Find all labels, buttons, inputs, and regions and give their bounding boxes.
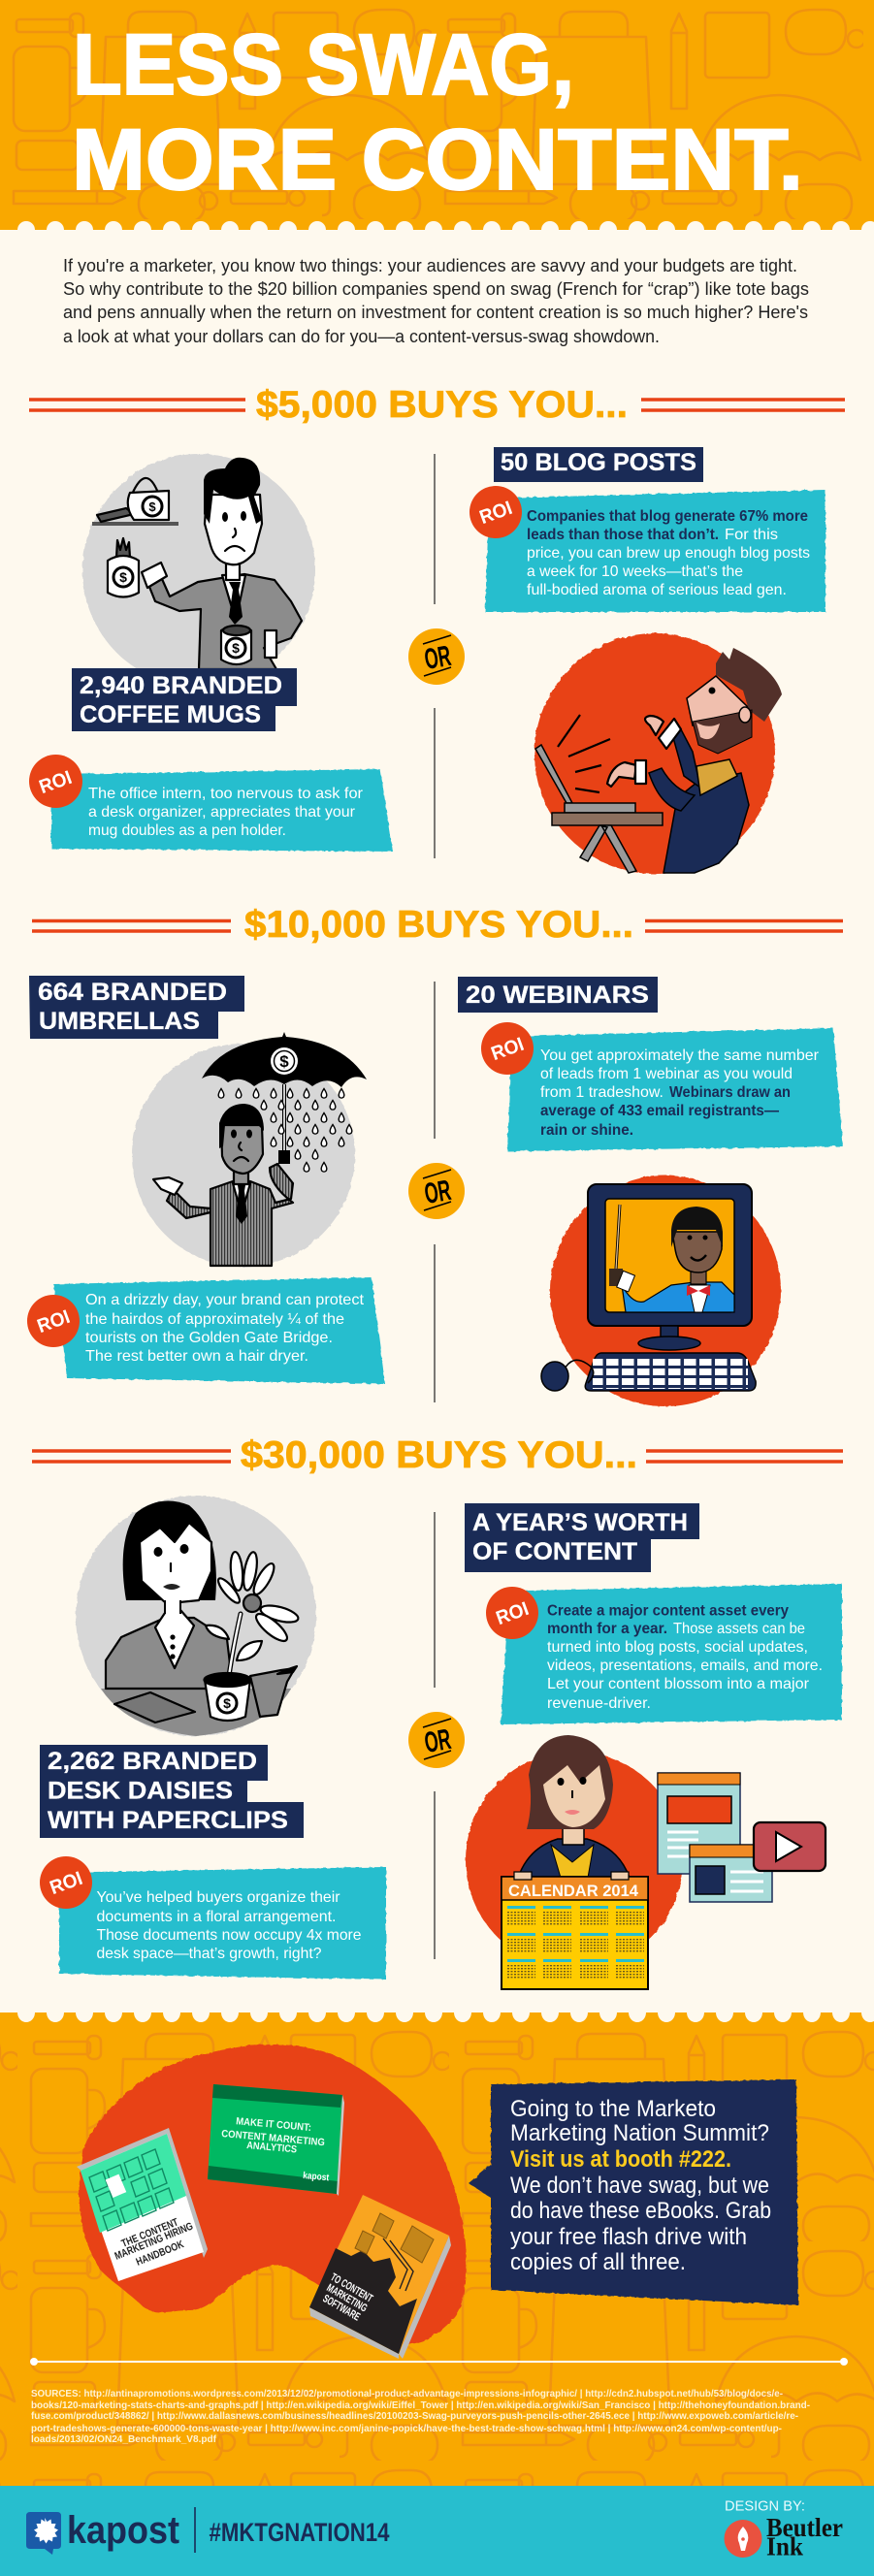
ebook: content marketing software: SOFTWARE bbox=[320, 2293, 362, 2324]
icon: shelf with mug bbox=[92, 478, 178, 526]
panel: ROI content: month for a year. bbox=[547, 1621, 667, 1637]
panel: ROI webinars: ROI bbox=[489, 1034, 527, 1065]
laptop and desk bbox=[535, 715, 663, 873]
footer promo band bbox=[0, 2012, 874, 2486]
label: 2,940 branded coffee mugs: 2,940 BRANDED bbox=[80, 672, 282, 699]
illustration: bearded blogger at laptop bbox=[534, 633, 782, 874]
label: a year's worth of content: OF CONTENT bbox=[472, 1538, 637, 1565]
panel: ROI content bbox=[486, 1584, 842, 1724]
label: 50 blog posts: 50 BLOG POSTS bbox=[501, 449, 696, 476]
rain drops bbox=[218, 1088, 352, 1172]
icon: umbrella: $ bbox=[279, 1052, 289, 1071]
ebook: content marketing hiring handbook: MARKETING HIRING bbox=[113, 2220, 195, 2263]
label: a year's worth of content: A YEAR’S WORTH bbox=[472, 1509, 688, 1536]
ebook: content marketing software: MARKETING bbox=[324, 2282, 369, 2315]
panel: ROI content: videos, presentations, emails, and more. bbox=[547, 1658, 823, 1674]
panel: ROI desk daisies: Those documents now occupy 4x more bbox=[97, 1927, 362, 1944]
intro text: So why contribute to the $20 billion companies spend on swag (French for “crap”) like tote bags bbox=[63, 279, 809, 299]
icon: daisy flower bbox=[206, 1551, 300, 1676]
panel: ROI mugs: a desk organizer, appreciates that your bbox=[88, 804, 356, 821]
icon: flower pot and stapler bbox=[204, 1666, 297, 1721]
panel: ROI blog posts: full-bodied aroma of serious lead gen. bbox=[527, 582, 787, 598]
icon: OR badge 2 bbox=[408, 1163, 465, 1219]
panel: ROI desk daisies: desk space—that’s growth, right? bbox=[97, 1946, 322, 1962]
label: 20 webinars bbox=[458, 977, 658, 1013]
icon: shelf with mug: $ bbox=[148, 499, 156, 514]
panel: ROI mugs: ROI bbox=[37, 767, 75, 798]
panel: ROI webinars: from 1 tradeshow. bbox=[540, 1084, 664, 1101]
intro text: If you're a marketer, you know two things: your audiences are savvy and your budgets are tight. bbox=[63, 256, 797, 275]
header banner bbox=[0, 0, 874, 230]
hashtag: #MKTGNATION14 bbox=[210, 2518, 390, 2547]
icon: OR badge 3 bbox=[408, 1712, 465, 1768]
illustration: woman with desk daisy bbox=[76, 1496, 316, 1736]
panel: ROI umbrellas: tourists on the Golden Gate Bridge. bbox=[85, 1330, 333, 1346]
keyboard and mouse bbox=[541, 1353, 756, 1391]
panel: ROI webinars: Webinars draw an bbox=[669, 1084, 791, 1101]
label: 2,940 branded coffee mugs: COFFEE MUGS bbox=[80, 701, 261, 728]
body bbox=[106, 1618, 233, 1689]
intro text: a look at what your dollars can do for you—a content-versus-swag showdown. bbox=[63, 327, 660, 346]
callout: Marketo summit: Going to the Marketo bbox=[510, 2096, 716, 2122]
panel: ROI blog posts: leads than those that don’t. bbox=[527, 527, 719, 543]
illustration: man with umbrella bbox=[132, 1032, 367, 1267]
label: 2,940 branded coffee mugs bbox=[72, 668, 297, 731]
heading: $5,000 bbox=[29, 384, 845, 426]
suit bbox=[167, 1164, 293, 1266]
panel: ROI content: Let your content blossom into a major bbox=[547, 1676, 810, 1692]
callout: Marketo summit: Visit us at booth #222. bbox=[510, 2146, 731, 2173]
illustration: woman with calendar and content assets bbox=[466, 1735, 825, 1989]
logo: Beutler Ink: Ink bbox=[766, 2531, 803, 2560]
ebook: content marketing hiring handbook: THE CONTENT bbox=[120, 2216, 180, 2250]
ebook: content marketing hiring handbook bbox=[77, 2128, 208, 2281]
panel: ROI mugs: mug doubles as a pen holder. bbox=[88, 822, 286, 839]
panel: ROI desk daisies: ROI bbox=[48, 1868, 85, 1899]
sources bbox=[31, 2388, 810, 2445]
label: a year's worth of content bbox=[465, 1503, 699, 1572]
callout: Marketo summit: do have these eBooks. Grab bbox=[510, 2198, 771, 2224]
panel: ROI blog posts: a week for 10 weeks—that’s the bbox=[527, 564, 743, 580]
calendar: CALENDAR 2014 bbox=[508, 1882, 639, 1900]
logo: kapost: kapost bbox=[67, 2509, 179, 2552]
icon: OR badge 3: OR bbox=[422, 1723, 454, 1759]
ebook: content marketing hiring handbook: HANDBOOK bbox=[135, 2238, 185, 2269]
panel: ROI umbrellas: ROI bbox=[35, 1306, 73, 1337]
panel: ROI blog posts: Companies that blog generate 67% more bbox=[527, 508, 808, 525]
calendar bbox=[502, 1872, 648, 1989]
panel: ROI blog posts bbox=[469, 486, 825, 612]
ebook: content marketing analytics: MAKE IT COUNT: bbox=[236, 2115, 311, 2134]
head bbox=[234, 1169, 248, 1184]
jacket bbox=[664, 773, 749, 873]
label: 664 branded umbrellas: UMBRELLAS bbox=[39, 1008, 200, 1035]
callout: Marketo summit: copies of all three. bbox=[510, 2249, 686, 2275]
label: 2,262 branded desk daisies: 2,262 BRANDED bbox=[48, 1748, 257, 1775]
panel: ROI umbrellas: the hairdos of approximately ¼ of the bbox=[85, 1311, 344, 1328]
panel: ROI webinars bbox=[481, 1022, 843, 1151]
panel: ROI umbrellas: The rest better own a hair dryer. bbox=[85, 1348, 308, 1365]
panel: ROI desk daisies: documents in a floral arrangement. bbox=[97, 1909, 336, 1925]
red blob bbox=[80, 2045, 466, 2344]
label: 664 branded umbrellas bbox=[29, 976, 244, 1039]
label: 20 webinars: 20 WEBINARS bbox=[466, 982, 649, 1009]
table bbox=[101, 1689, 291, 1736]
logo: kapost bbox=[26, 2509, 179, 2555]
icon: OR badge 1 bbox=[408, 628, 465, 685]
panel: ROI content: revenue-driver. bbox=[547, 1695, 651, 1712]
callout: Marketo summit: your free flash drive with bbox=[510, 2224, 747, 2250]
panel: ROI webinars: rain or shine. bbox=[540, 1122, 633, 1139]
callout: Marketo summit: We don’t have swag, but we bbox=[510, 2173, 769, 2199]
label: 2,262 branded desk daisies: WITH PAPERCLIPS bbox=[48, 1807, 288, 1834]
callout: Marketo summit bbox=[469, 2079, 798, 2305]
panel: ROI desk daisies bbox=[40, 1856, 386, 1980]
logo: Beutler Ink: DESIGN BY: bbox=[725, 2498, 805, 2514]
ebook: content marketing software bbox=[309, 2195, 451, 2359]
panel: ROI content: ROI bbox=[494, 1598, 532, 1629]
panel: ROI desk daisies: You’ve helped buyers organize their bbox=[97, 1889, 340, 1906]
footer bar bbox=[0, 2486, 874, 2576]
title bbox=[72, 16, 803, 208]
logo: Beutler Ink: Beutler bbox=[766, 2513, 843, 2542]
logo: Beutler Ink bbox=[724, 2498, 843, 2560]
panel: ROI content: Those assets can be bbox=[673, 1621, 805, 1637]
head bbox=[687, 676, 749, 729]
illustration: webinar presenter on monitor bbox=[541, 1175, 781, 1406]
heading: $10,000: $10,000 BUYS YOU... bbox=[244, 904, 633, 946]
heading: $30,000 bbox=[32, 1434, 843, 1476]
icon: flower pot and stapler: $ bbox=[223, 1695, 231, 1711]
sources: port-tradeshows-generate-600000-tons-waste-year | http://www.inc.com/janine-popick/have-the-best-trade-show-schwag.html | http://www.on24.com/wp-content/up- bbox=[31, 2423, 782, 2434]
label: 2,262 branded desk daisies: DESK DAISIES bbox=[48, 1777, 233, 1804]
ebook: content marketing analytics: kapost bbox=[303, 2171, 330, 2183]
panel: ROI blog posts: price, you can brew up enough blog posts bbox=[527, 545, 810, 562]
panel: ROI blog posts: For this bbox=[725, 527, 778, 543]
icon: umbrella bbox=[202, 1032, 367, 1154]
icon: mug with pens bbox=[108, 538, 167, 597]
label: 2,262 branded desk daisies bbox=[40, 1745, 304, 1838]
panel: ROI umbrellas bbox=[27, 1277, 385, 1384]
ebook: content marketing analytics: ANALYTICS bbox=[246, 2140, 298, 2156]
papers bbox=[114, 1692, 195, 1723]
icon: mug with pens: $ bbox=[119, 569, 127, 585]
panel: ROI umbrellas: On a drizzly day, your brand can protect bbox=[85, 1292, 365, 1308]
ebook: content marketing analytics: CONTENT MARKETING bbox=[221, 2128, 325, 2148]
ebook: content marketing software: TO CONTENT bbox=[328, 2271, 374, 2305]
icon: held mug bbox=[221, 626, 276, 664]
panel: ROI mugs: The office intern, too nervous to ask for bbox=[88, 786, 364, 802]
intro text: and pens annually when the return on investment for content creation is so much higher? Here's bbox=[63, 303, 808, 322]
panel: ROI webinars: of leads from 1 webinar as you would bbox=[540, 1066, 793, 1082]
content asset cards bbox=[658, 1773, 825, 1902]
icon: held mug: $ bbox=[232, 640, 240, 656]
heading: $10,000 bbox=[32, 904, 843, 946]
sources: loads/2013/02/ON24_Benchmark_V8.pdf bbox=[31, 2433, 216, 2445]
hands and cuffs bbox=[645, 716, 664, 735]
panel: ROI content: turned into blog posts, social updates, bbox=[547, 1639, 808, 1656]
sources: books/120-marketing-stats-charts-and-graphs.pdf | http://en.wikipedia.org/wiki/Eiffel_Tower | http://en.wikipedia.org/wiki/San_Francisco | http://thehoneyfoundation.brand- bbox=[31, 2399, 810, 2411]
icon: OR badge 1: OR bbox=[422, 640, 454, 676]
title: LESS SWAG, bbox=[73, 16, 574, 113]
woman bbox=[518, 1735, 630, 1878]
panel: ROI content: Create a major content asset every bbox=[547, 1602, 789, 1620]
sources: fuse.com/product/348862/ | http://www.dallasnews.com/business/headlines/20100203-Swag-purveyors-push-pencils-other-2645.ece | http://www.expoweb.com/article/re- bbox=[31, 2410, 798, 2422]
neck and face bbox=[226, 561, 240, 580]
intro text bbox=[63, 256, 809, 346]
icon: OR badge 2: OR bbox=[422, 1175, 454, 1210]
presenter bbox=[609, 1205, 734, 1312]
panel: ROI mugs bbox=[29, 755, 393, 852]
panel: ROI webinars: average of 433 email registrants— bbox=[540, 1103, 779, 1119]
label: 664 branded umbrellas: 664 BRANDED bbox=[38, 979, 227, 1006]
hair and face bbox=[123, 1501, 216, 1600]
heading: $30,000: $30,000 BUYS YOU... bbox=[241, 1434, 637, 1476]
panel: ROI blog posts: ROI bbox=[477, 498, 515, 529]
callout: Marketo summit: Marketing Nation Summit? bbox=[510, 2120, 769, 2146]
ebook: content marketing analytics bbox=[208, 2084, 344, 2196]
panel: ROI webinars: You get approximately the same number bbox=[540, 1047, 820, 1064]
sources: SOURCES: http://antinapromotions.wordpress.com/2013/12/02/promotional-product-advantage-impressions-infographic/ | http://cdn2.hubspot.net/hub/53/blog/docs/e- bbox=[31, 2388, 783, 2399]
monitor bbox=[588, 1184, 752, 1350]
heading: $5,000: $5,000 BUYS YOU... bbox=[256, 384, 628, 426]
title: MORE CONTENT. bbox=[72, 111, 803, 208]
illustration: man with coffee mugs bbox=[82, 454, 315, 687]
suit body bbox=[147, 570, 302, 669]
